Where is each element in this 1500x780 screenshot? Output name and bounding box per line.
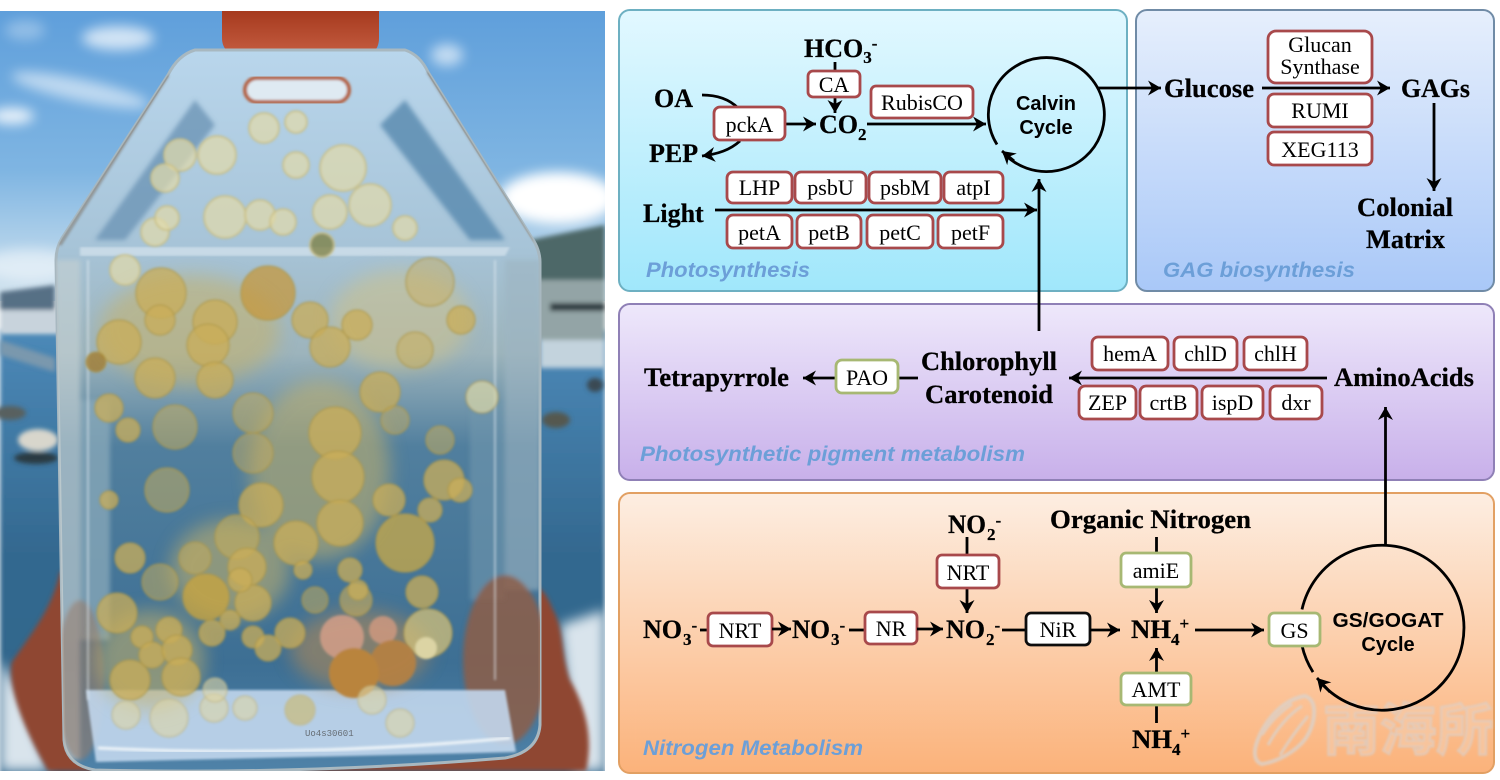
metabolite: NH4+ centre: NH: [1131, 615, 1171, 644]
arrow: Glucose to GAGs: [1262, 87, 1390, 89]
arrow: pckA to CO2: [785, 123, 816, 125]
metabolite: HCO3-: -: [872, 34, 878, 53]
arrow: OA through pckA to PEP: [702, 95, 740, 156]
cycle: Calvin cycle: Calvin: [1016, 93, 1076, 115]
arrow: GAGs to colonial matrix: [1433, 103, 1435, 191]
arrow: NO2- through NRT: [966, 537, 968, 613]
gene: atpI: atpI: [956, 175, 991, 200]
metabolite subscript: 3- left: -: [692, 616, 698, 635]
panel: nitrogen metabolism: [619, 493, 1494, 773]
arrow: NR to NO2-: [917, 628, 943, 630]
gene: LHP: [727, 172, 792, 203]
gene: NR: NR: [876, 616, 907, 641]
heading: Nitrogen Metabolism: Nitrogen Metabolism: [643, 737, 863, 760]
gene: psbU: [795, 172, 866, 203]
gene: petC: petC: [879, 220, 921, 245]
gene: XEG113: [1268, 132, 1372, 165]
panel: photosynthetic pigment metabolism: [619, 304, 1494, 480]
cycle: GS/GOGAT cycle: GS/GOGAT: [1332, 610, 1444, 632]
metabolite: Chlorophyll and Carotenoid: [921, 347, 1057, 409]
metabolite subscript: 4+ bottom: 4: [1172, 740, 1180, 759]
gene: RubisCO: [871, 86, 973, 118]
cycle: GS/GOGAT cycle: Cycle: [1361, 634, 1415, 656]
arrow: NH4+ through AMT: [1155, 648, 1158, 723]
arrow: NiR to NH4+: [1090, 629, 1120, 631]
gene: petC: [867, 215, 933, 248]
arrow: GS/GOGAT cycle to AminoAcids: [1384, 407, 1387, 545]
metabolite: OA: OA: [654, 84, 693, 113]
gene: NiR: [1002, 613, 1090, 645]
metabolite: NO3- middle: NO: [792, 615, 830, 644]
metabolite: NO2- centre: NO: [946, 615, 985, 644]
metabolite subscript: 2- centre: 2: [986, 630, 994, 649]
gene: NRT left: [700, 613, 772, 646]
photo: pale colonies in flask shoulder: [110, 111, 417, 285]
heading: GAG biosynthesis: GAG biosynthesis: [1163, 259, 1355, 282]
metabolite: Light: Light: [643, 199, 704, 228]
gene: crtB: [1140, 386, 1197, 419]
watermark: 南海所: [1323, 699, 1493, 762]
arrow: NH4+ to GS: [1195, 629, 1264, 631]
arrow: CO2 to Calvin cycle: [867, 123, 986, 125]
gene: NRT left: NRT: [719, 618, 762, 643]
gene: ZEP: [1079, 386, 1136, 419]
gene: NiR: NiR: [1040, 617, 1077, 642]
gene: XEG113: XEG113: [1281, 137, 1359, 162]
metabolite subscript: 3- left: 3: [683, 630, 692, 649]
metabolite: GAGs: GAGs: [1401, 74, 1470, 103]
gene: CA: [808, 71, 860, 97]
gene: chlD: chlD: [1184, 341, 1227, 366]
photo background: sky, clouds, hills and sea: [0, 11, 616, 780]
gene: PAO: [836, 360, 898, 393]
gene: RubisCO: RubisCO: [881, 90, 963, 115]
metabolite subscript: 2- centre: -: [994, 616, 1000, 635]
gene: chlH: chlH: [1254, 341, 1297, 366]
photo: hazy colony patches: [95, 270, 470, 710]
gene: psbU: psbU: [807, 175, 854, 200]
metabolite: NH4+ bottom: NH: [1132, 725, 1172, 754]
gene: ZEP: ZEP: [1088, 390, 1127, 415]
gene: LHP: LHP: [739, 175, 780, 200]
gene: AMT: AMT: [1132, 677, 1181, 702]
gene: dxr: [1270, 386, 1322, 419]
panel: photosynthesis: [619, 10, 1127, 291]
metabolite subscript: 4+ centre: 4: [1171, 630, 1180, 649]
metabolite: Glucose: Glucose: [1164, 74, 1254, 103]
cycle: Calvin cycle: [988, 58, 1104, 172]
gene: pckA: [714, 107, 785, 140]
metabolite subscript: 2- top: 2: [987, 525, 996, 544]
metabolite subscript: 3- middle: 3: [831, 630, 840, 649]
gene: Glucan Synthase: Synthase: [1280, 54, 1360, 79]
metabolite: CO2: CO: [819, 110, 858, 139]
metabolite: CO2: 2: [858, 125, 866, 144]
gene: atpI: [944, 172, 1003, 203]
gene: chlH: [1244, 337, 1307, 370]
metabolite: NO3- left: NO: [643, 615, 682, 644]
arrow: Light reactions: [715, 209, 1037, 211]
arrow: PAO to Tetrapyrrole: [803, 377, 918, 379]
photo: red flask cap: [222, 11, 379, 54]
metabolite: Chlorophyll and Carotenoid: Chlorophyll: [921, 347, 1057, 376]
gene: dxr: dxr: [1281, 390, 1311, 415]
metabolite: AminoAcids: AminoAcids: [1334, 363, 1474, 392]
gene: ispD: [1202, 386, 1263, 419]
panel: GAG biosynthesis: [1136, 10, 1494, 291]
gene: CA: CA: [819, 72, 849, 97]
arrow: pigments to Calvin cycle: [1038, 179, 1040, 331]
photo: hand holding the flask: [11, 572, 589, 771]
gene: Glucan Synthase: [1268, 31, 1372, 83]
metabolite subscript: 4+ centre: +: [1180, 614, 1189, 633]
metabolite: HCO3-: 3: [863, 48, 872, 67]
metabolite: Chlorophyll and Carotenoid: Carotenoid: [925, 380, 1054, 409]
gene: amiE: amiE: [1133, 558, 1179, 583]
gene: petA: petA: [738, 220, 781, 245]
arrow: NRT to NO3-: [772, 628, 791, 630]
metabolite: Colonial Matrix: Colonial: [1357, 193, 1453, 222]
gene: RUMI: RUMI: [1291, 98, 1349, 123]
photo: handwritten flask label: Uo4s30601: [305, 729, 354, 739]
heading: Photosynthesis: Photosynthesis: [646, 259, 810, 282]
gene: NRT top: [937, 555, 999, 588]
gene: psbM: psbM: [880, 175, 930, 200]
metabolite: NO2- top: NO: [948, 510, 986, 539]
gene: PAO: PAO: [846, 365, 888, 390]
cycle: Calvin cycle: Cycle: [1019, 117, 1073, 139]
gene: GS: GS: [1280, 618, 1309, 643]
gene: NRT top: NRT: [947, 560, 990, 585]
gene: petA: [727, 215, 792, 248]
arrow: AminoAcids to pigments: [1069, 377, 1327, 379]
cycle: GS/GOGAT cycle: [1302, 545, 1464, 710]
gene: petB: petB: [808, 220, 850, 245]
gene: psbM: [869, 172, 941, 203]
gene: ispD: ispD: [1212, 390, 1253, 415]
arrow: Organic Nitrogen through amiE: [1155, 537, 1158, 613]
metabolite: Colonial Matrix: Matrix: [1366, 225, 1445, 254]
heading: Photosynthetic pigment metabolism: Photosynthetic pigment metabolism: [640, 443, 1025, 466]
metabolite: HCO3-: HCO: [804, 34, 863, 63]
photo: pale colonies on flask floor: [112, 678, 414, 737]
photo: clear plastic flask body: [56, 50, 547, 771]
metabolite: Colonial Matrix: [1357, 193, 1453, 254]
arrow: HCO3 through CA to CO2: [834, 62, 836, 113]
gene: chlD: [1174, 337, 1237, 370]
gene: hemA: [1092, 337, 1168, 370]
gene: NR: [849, 612, 917, 644]
gene: hemA: hemA: [1103, 341, 1157, 366]
gene: AMT: [1121, 673, 1191, 705]
gene: crtB: crtB: [1150, 390, 1187, 415]
gene: petB: [797, 215, 861, 248]
gene: pckA: pckA: [726, 112, 773, 137]
gene: RUMI: [1268, 94, 1372, 127]
gene: Glucan Synthase: Glucan: [1288, 32, 1352, 57]
photo: yellow-olive colonies: [86, 258, 498, 700]
metabolite: Organic Nitrogen: Organic Nitrogen: [1050, 505, 1252, 534]
metabolite subscript: 4+ bottom: +: [1180, 724, 1190, 743]
gene: petF: [938, 215, 1003, 248]
arrow: Calvin cycle to Glucose: [1098, 87, 1161, 89]
gene: amiE: [1121, 553, 1191, 587]
metabolite: Tetrapyrrole: Tetrapyrrole: [644, 363, 789, 392]
gene: GS: [1269, 613, 1320, 646]
photo: culture flask with algal colonies: [0, 11, 616, 780]
metabolite subscript: 2- top: -: [996, 511, 1002, 530]
metabolite: PEP: PEP: [649, 139, 698, 168]
gene: petF: petF: [951, 220, 990, 245]
metabolite subscript: 3- middle: -: [840, 616, 846, 635]
watermark: [1255, 696, 1493, 764]
photo: orange and pink colonies over the hand: [320, 615, 437, 698]
